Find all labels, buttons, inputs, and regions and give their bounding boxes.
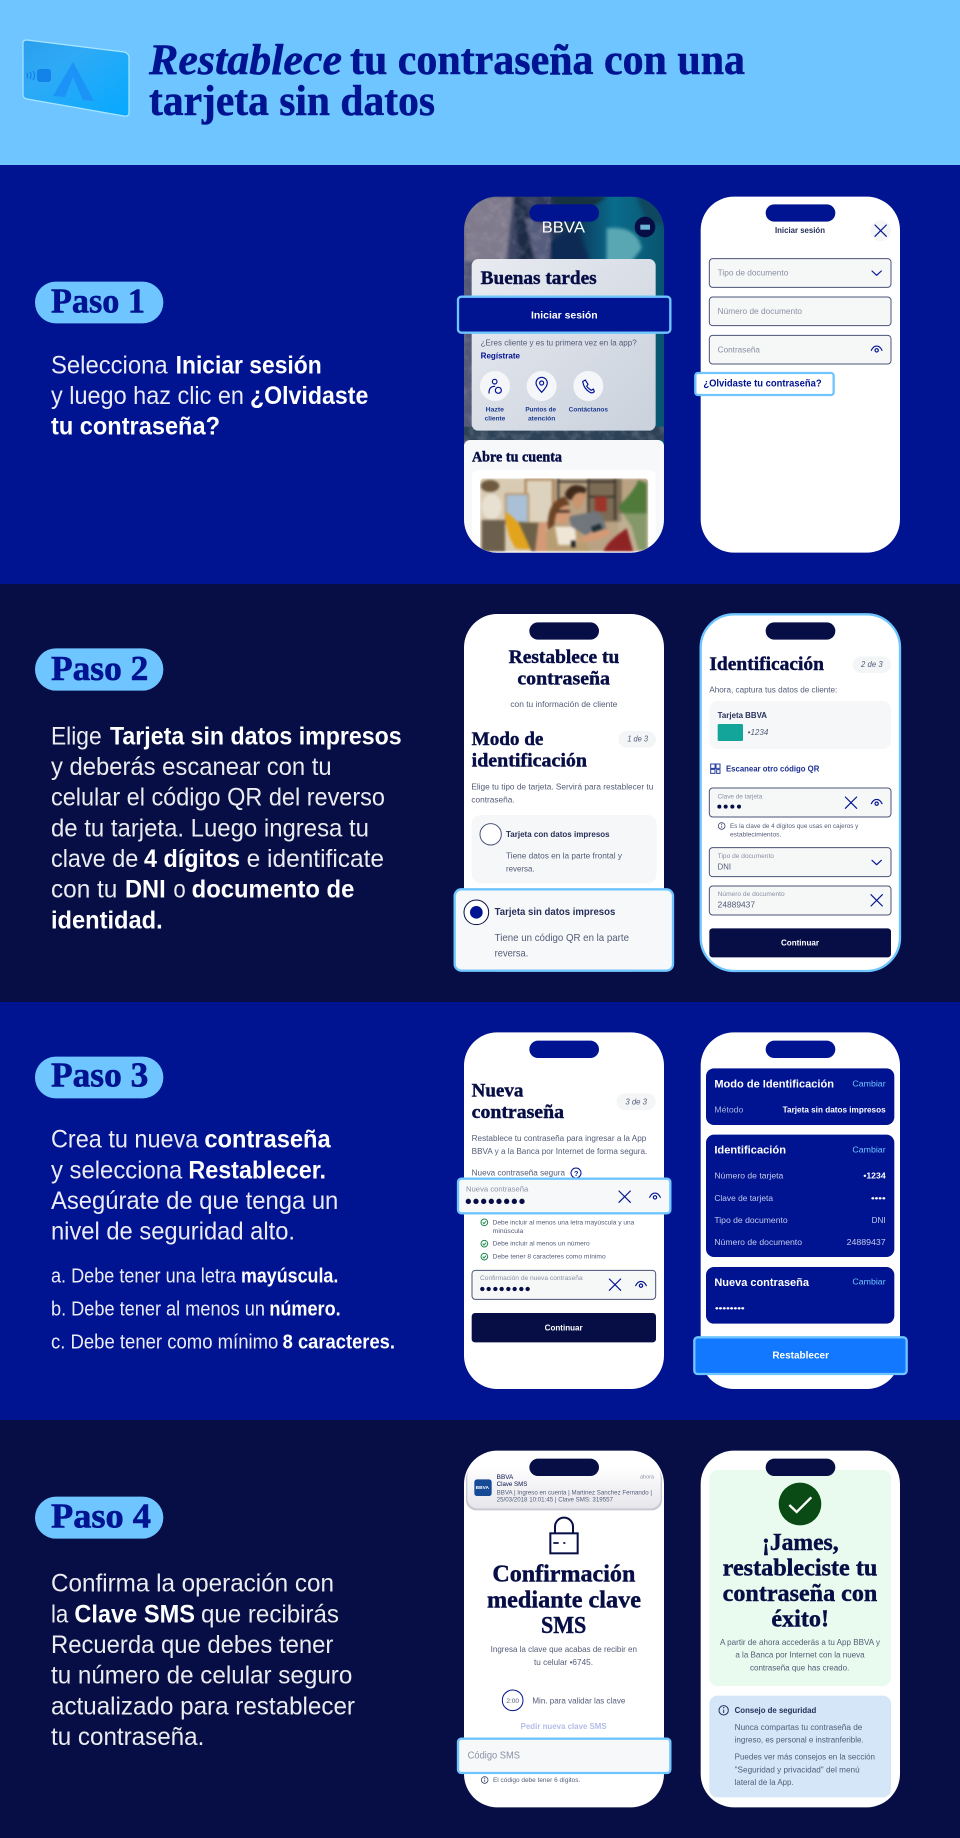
section heading [472,729,587,772]
phone: confirmacion sms [458,1451,670,1807]
paso 4 phones [458,1451,900,1807]
summary: identificacion: Número de tarjeta [714,1171,784,1181]
requirements list: a. Debe tener una letra [51,1266,237,1288]
icon: check [779,1483,821,1525]
heading: Restablece tu [509,647,620,668]
instructions: y selecciona [51,1156,183,1184]
instructions: actualizado para restablecer [51,1692,356,1720]
step counter: 1 de 3 [627,735,649,744]
icon: padlock [550,1518,578,1553]
paso 3 phones [458,1032,907,1389]
title: tu contraseña con una [350,37,745,84]
field: numero de documento [709,886,891,915]
field: tipo de documento: DNI [718,861,731,871]
summary: nueva contrasena: Nueva contraseña [714,1277,810,1289]
step badge [35,1496,163,1539]
field: numero de documento [709,297,891,326]
security tip panel: "Seguridad y privacidad" del menú [735,1764,860,1774]
summary: identificacion [706,1135,894,1257]
heading: Identificación [709,654,824,675]
instructions: Asegúrate de que tenga un [51,1187,338,1215]
quick actions [480,371,608,422]
instructions: Tarjeta sin datos impresos [110,722,402,750]
password rules [481,1219,635,1261]
step counter: 3 de 3 [625,1097,648,1106]
field: numero de documento: Número de documento [718,891,785,898]
heading: con tu información de cliente [510,700,618,709]
paso 3 text block [35,1056,395,1354]
summary: identificacion: •1234 [863,1171,886,1181]
timer [502,1690,626,1711]
button: continuar: Continuar [545,1323,583,1332]
section background: paso 4 [0,1420,960,1838]
field label with help icon: Nueva contraseña segura [472,1168,565,1178]
security tip panel: lateral de la App. [735,1777,794,1787]
description: contraseña. [471,795,515,805]
timer: Min. para validar las clave [532,1695,626,1705]
summary: modo de identificacion: Modo de Identificación [714,1078,834,1090]
highlighted field: nueva contrasena: Nueva contraseña [466,1184,529,1193]
instructions: Crea tu nueva [51,1126,199,1154]
summary: identificacion: 24889437 [847,1237,886,1247]
description: Restablece tu contraseña para ingresar a la App [472,1133,647,1143]
summary: identificacion: Identificación [714,1145,786,1157]
instructions: celular el código QR del reverso [51,784,385,812]
field: confirmacion: Confirmación de nueva contraseña [480,1275,583,1282]
step badge: Paso 3 [51,1056,148,1095]
step badge [35,1056,163,1098]
summary: identificacion: Número de documento [714,1237,802,1247]
link: escanear qr: Escanear otro código QR [726,763,820,773]
instructions: tu número de celular seguro [51,1662,352,1690]
instructions: 4 dígitos [144,845,240,873]
instruction [491,1644,637,1667]
greeting card: Buenas tardes [481,268,597,289]
summary: modo de identificacion [706,1068,894,1125]
highlighted option: tarjeta sin datos: Tarjeta sin datos impresos [495,907,615,918]
bottom sheet [464,440,664,560]
instructions: Recuerda que debes tener [51,1631,334,1659]
password rules: Debe incluir al menos un número [493,1241,590,1248]
heading: contraseña [517,669,610,690]
phone: modo de identificacion [455,614,673,972]
summary: identificacion: •••• [871,1193,886,1203]
instructions [51,351,368,440]
requirements list: 8 caracteres. [283,1332,395,1354]
security tip panel: Consejo de seguridad [735,1706,816,1715]
heading: contraseña [472,1102,564,1123]
description [472,1133,647,1156]
instructions: ¿Olvidaste [250,382,368,410]
camera notch [529,204,599,222]
hint: El código debe tener 6 dígitos. [493,1777,581,1784]
success panel: A partir de ahora accederás a tu App BBVA y [720,1637,881,1647]
title: Restablece [148,37,342,84]
paso 4 text block [35,1496,356,1751]
option: tarjeta con datos [472,815,657,883]
sms notification: 25/03/2018 10:01:45 | Clave SMS: 319557 [497,1498,614,1504]
field: numero de documento: 24889437 [718,899,755,909]
summary: identificacion: Cambiar [852,1144,886,1154]
menu button [635,217,655,237]
camera notch [766,622,835,640]
success panel [709,1470,891,1686]
heading: Nueva [472,1081,524,1102]
success panel: ¡James, [762,1530,839,1556]
summary: modo de identificacion: Tarjeta sin datos impresos [783,1105,886,1115]
highlighted field: codigo sms [458,1739,670,1773]
screen title: Iniciar sesión [775,226,825,235]
step counter [853,656,891,673]
quick actions: cliente [485,415,506,422]
sms notification: BBVA | Ingreso en cuenta | Martinez Sanchez Fernando | [497,1490,652,1496]
camera notch [529,1041,599,1058]
highlighted button: iniciar sesion: Iniciar sesión [531,310,598,321]
instructions [51,1570,356,1751]
instructions: tu contraseña. [51,1723,204,1751]
step badge: Paso 1 [51,282,145,321]
button: continuar [709,928,891,957]
section background: paso 3 [0,1002,960,1420]
requirements list: número. [269,1298,341,1320]
phone: exito [701,1451,900,1807]
requirements list: mayúscula. [241,1266,338,1288]
instructions [51,1126,338,1246]
summary: identificacion: Clave de tarjeta [714,1193,773,1203]
instructions: y deberás escanear con tu [51,753,332,781]
card summary [709,701,891,749]
instructions: tu contraseña? [51,412,220,440]
field: contrasena [709,335,891,364]
heading: SMS [541,1613,586,1639]
requirements list: b. Debe tener al menos un [51,1298,265,1320]
instructions: e identificate [247,845,384,873]
option: tarjeta con datos: Tarjeta con datos impresos [506,830,610,839]
instructions: Elige [51,722,102,750]
greeting card [472,259,656,431]
requirements list: c. Debe tener como mínimo [51,1332,278,1354]
instructions: la [51,1600,69,1628]
bottom sheet: Abre tu cuenta [472,450,562,466]
instructions: nivel de seguridad alto. [51,1218,295,1246]
security tip panel [709,1696,891,1797]
paso 2 phones [455,614,900,972]
text: first time prompt [481,339,637,361]
button: continuar: Continuar [781,938,819,947]
summary: identificacion: DNI [872,1215,886,1225]
button: continuar [472,1313,656,1342]
logo: BBVA [542,220,586,237]
quick actions: Contáctanos [569,407,608,414]
field label with help icon: ? [574,1169,579,1178]
sms notification: BBVA [476,1485,490,1490]
requirements list [51,1266,395,1354]
section heading: identificación [472,751,587,772]
highlighted option: tarjeta sin datos [455,889,673,971]
heading: Confirmación [492,1562,635,1588]
success panel: contraseña que has creado. [750,1663,849,1673]
summary: nueva contrasena: •••••••• [715,1304,745,1313]
password rules: minúscula [493,1228,524,1235]
step badge: Paso 4 [51,1496,151,1535]
option: tarjeta con datos: Tiene datos en la parte frontal y [506,851,623,861]
instructions: Restablecer. [188,1156,326,1184]
summary: modo de identificacion: Método [714,1105,744,1115]
hint: Es la clave de 4 dígitos que usas en cajeros y [730,823,859,830]
camera notch [766,1459,835,1476]
instructions: contraseña [204,1126,332,1154]
quick actions: Hazte [486,407,505,414]
description: Elige tu tipo de tarjeta. Servirá para restablecer tu [471,782,654,792]
hint [718,823,859,839]
instructions: documento de [192,876,354,904]
step counter [618,731,656,748]
summary: identificacion: Tipo de documento [714,1215,788,1225]
quick actions: Puntos de [525,407,556,414]
title: tarjeta sin datos [149,78,435,125]
highlighted button: iniciar sesion [458,297,670,333]
field: tipo de documento: Tipo de documento [718,268,789,278]
link: nueva clave: Pedir nueva clave SMS [521,1722,607,1731]
instructions: de tu tarjeta. Luego ingresa tu [51,814,369,842]
highlighted button: restablecer [694,1337,907,1374]
instructions: con tu [51,876,117,904]
instruction: Ingresa la clave que acabas de recibir en [491,1644,637,1654]
instructions: Selecciona [51,351,169,379]
highlighted link: olvidaste contrasena: ¿Olvidaste tu contraseña? [703,379,822,390]
field: clave de tarjeta: Clave de tarjeta [718,793,763,800]
success panel: a la Banca por Internet con la nueva [735,1650,865,1660]
instructions: que recibirás [201,1600,339,1628]
instructions: clave de [51,845,138,873]
instructions: identidad. [51,906,163,934]
section heading: Modo de [472,729,544,750]
section background: paso 1 [0,165,960,584]
camera notch [529,622,599,640]
summary: nueva contrasena: Cambiar [852,1277,886,1287]
security tip panel: Nunca compartas tu contraseña de [735,1722,863,1732]
paso 1 text block [35,282,368,440]
success panel: restableciste tu [723,1555,877,1581]
instructions: Clave SMS [74,1600,195,1628]
phone: login form [695,197,900,553]
field: numero de documento: Número de documento [718,306,802,316]
step badge: Paso 2 [51,649,148,688]
sms notification [466,1467,662,1510]
paso 2 text block [35,648,402,934]
password rules: Debe tener 8 caracteres como mínimo [493,1254,606,1261]
summary: nueva contrasena [706,1267,894,1324]
heading [509,647,620,709]
instructions: Confirma la operación con [51,1570,334,1598]
timer: 2:00 [506,1698,519,1705]
camera notch [766,1041,835,1058]
card summary: Tarjeta BBVA [718,711,767,720]
section background: paso 2 [0,584,960,1002]
highlighted field: nueva contrasena [458,1179,670,1213]
step counter [617,1093,656,1110]
phone: home screen [458,197,670,560]
password rules: Debe incluir al menos una letra mayúscula y una [493,1219,635,1226]
field: clave de tarjeta [709,788,891,817]
paso 1 phones [458,197,900,560]
sms notification: Clave SMS [497,1481,527,1488]
security tip panel: Puedes ver más consejos en la sección [735,1752,875,1762]
field: tipo de documento [709,259,891,287]
camera notch [766,204,835,222]
sms notification: ahora [640,1475,654,1481]
step badge [35,648,163,691]
highlighted option: tarjeta sin datos: reversa. [495,948,528,959]
field: confirmacion [472,1270,656,1299]
photo: couple on a sofa [480,478,648,552]
text: first time prompt: Regístrate [481,351,520,361]
security tip panel: ingreso, es personal e instranferible. [735,1735,864,1745]
description: BBVA y a la Banca por Internet de forma segura. [472,1146,647,1156]
phone: nueva contrasena [458,1032,670,1389]
header band [0,0,960,165]
close button [870,220,891,241]
card summary: •1234 [748,728,769,737]
summary: modo de identificacion: Cambiar [852,1078,886,1088]
phone: resumen [694,1032,907,1389]
camera notch [529,1459,599,1476]
prompt: Ahora, captura tus datos de cliente: [709,685,837,695]
highlighted button: restablecer: Restablecer [772,1350,829,1361]
phone: identificacion [701,614,900,971]
success panel: éxito! [771,1606,829,1632]
quick actions: atención [528,415,555,422]
highlighted field: codigo sms: Código SMS [468,1750,520,1761]
instructions: o [173,876,186,904]
step counter: 2 de 3 [860,660,883,669]
success panel: contraseña con [723,1581,877,1607]
heading [487,1562,641,1639]
sms notification: BBVA [497,1474,514,1481]
option: tarjeta con datos: reversa. [506,864,535,874]
instructions: y luego haz clic en [51,382,244,410]
text: first time prompt: ¿Eres cliente y es tu primera vez en la app? [481,339,637,348]
highlighted link: olvidaste contrasena [695,373,834,395]
hint: establecimientos. [730,832,782,839]
instructions [51,722,402,934]
field: tipo de documento [709,848,891,877]
instructions: DNI [125,876,166,904]
field: contrasena: Contraseña [718,344,760,354]
description [471,782,654,805]
title [148,37,745,125]
field: tipo de documento: Tipo de documento [718,853,774,860]
instructions: Iniciar sesión [176,351,322,379]
heading: mediante clave [487,1587,641,1613]
highlighted option: tarjeta sin datos: Tiene un código QR en la parte [495,933,629,944]
instruction: tu celular •6745. [534,1657,593,1667]
icon: contactless card [23,40,129,116]
heading [472,1081,564,1123]
